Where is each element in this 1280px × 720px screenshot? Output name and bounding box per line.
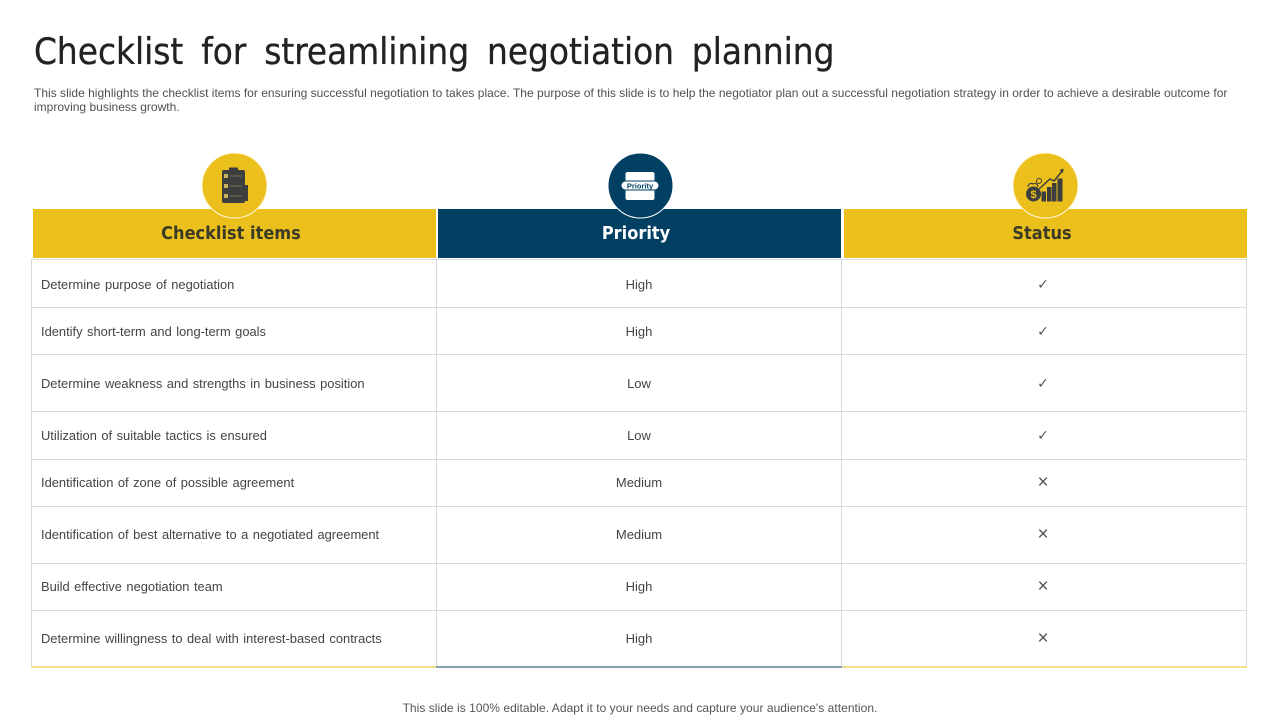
row 6 priority: Medium <box>616 527 662 542</box>
icon: money growth chart: $ <box>1030 189 1037 201</box>
row 1 text: Determine purpose of negotiation <box>41 277 234 292</box>
row 6 text: Identification of best alternative to a negotiated agreement <box>41 527 379 542</box>
icon: priority tag: Priority <box>627 182 654 190</box>
row 8 status: × <box>1037 628 1049 649</box>
row 4 status: ✓ <box>1037 428 1049 444</box>
row 4 priority: Low <box>627 428 651 443</box>
row 1 priority: High <box>626 277 652 292</box>
row 5 priority: Medium <box>616 475 662 490</box>
row 3 priority: Low <box>627 376 651 391</box>
row 3 text: Determine weakness and strengths in business position <box>41 376 365 391</box>
row 4 text: Utilization of suitable tactics is ensured <box>41 428 267 443</box>
row 2 text: Identify short-term and long-term goals <box>41 324 266 339</box>
row 1 status: ✓ <box>1037 277 1049 293</box>
row 8 priority: High <box>626 631 652 646</box>
title: Checklist for streamlining negotiation planning <box>34 30 834 73</box>
row 7 status: × <box>1037 576 1049 597</box>
header: status: Status <box>1012 223 1072 244</box>
header: checklist items: Checklist items <box>161 223 301 244</box>
row 3 status: ✓ <box>1037 376 1049 392</box>
footer note: This slide is 100% editable. Adapt it to your needs and capture your audience's attention. <box>403 701 877 715</box>
row 2 priority: High <box>626 324 652 339</box>
header: priority: Priority <box>602 223 670 244</box>
row 5 text: Identification of zone of possible agreement <box>41 475 294 490</box>
row 7 priority: High <box>626 579 652 594</box>
row 6 status: × <box>1037 524 1049 545</box>
description: This slide highlights the checklist items for ensuring successful negotiation to takes place. The purpose of this slide is to help the negotiator plan out a successful negotiation strategy in order to achieve a desirable outcome for improving business growth. <box>34 86 1227 114</box>
icon: money growth chart <box>1013 152 1078 218</box>
row 7 text: Build effective negotiation team <box>41 579 223 594</box>
row 5 status: × <box>1037 472 1049 493</box>
header: status <box>844 209 1247 258</box>
row 8 text: Determine willingness to deal with interest-based contracts <box>41 631 382 646</box>
icon: priority tag <box>608 154 672 218</box>
header: checklist items <box>33 209 436 258</box>
row 2 status: ✓ <box>1037 324 1049 340</box>
header: priority <box>438 209 841 258</box>
icon: checklist clipboard <box>202 152 267 218</box>
